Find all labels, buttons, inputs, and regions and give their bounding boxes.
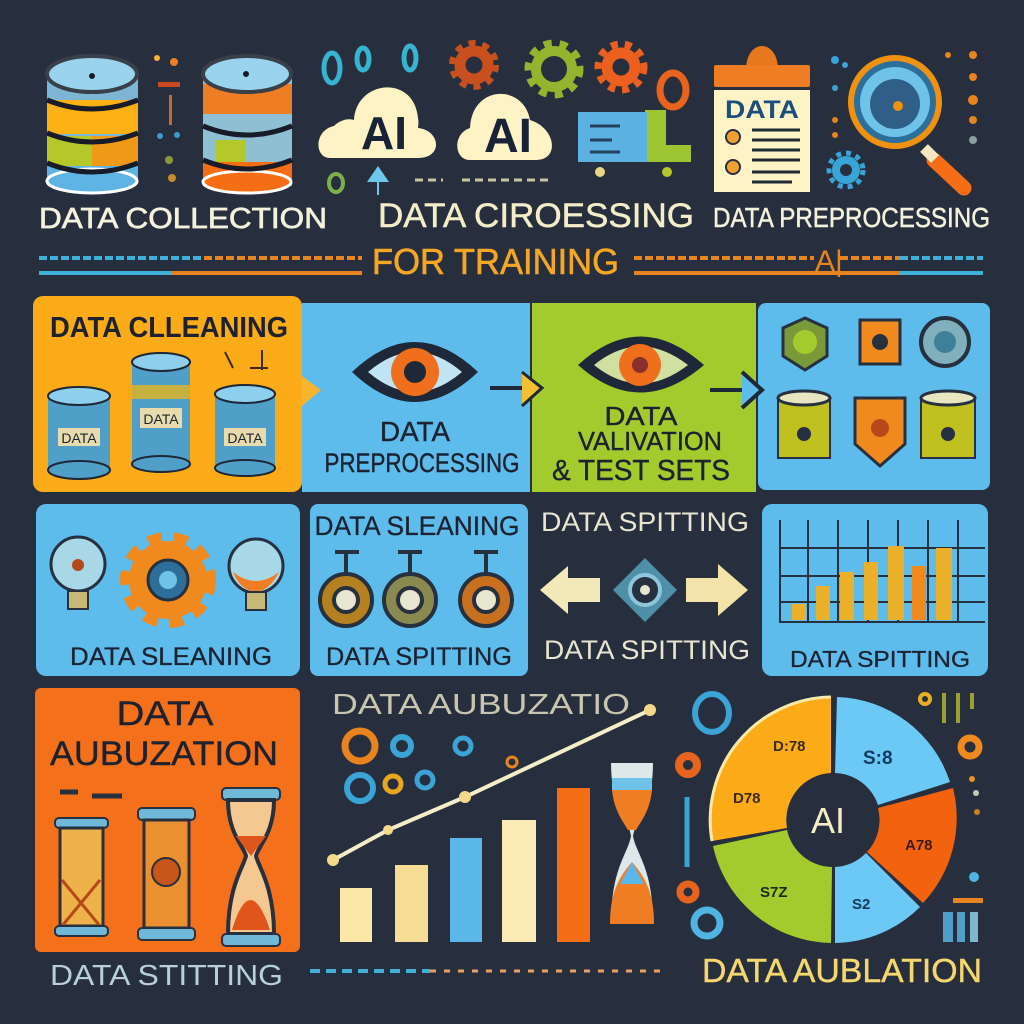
arrow: validation to icon grid xyxy=(710,372,762,408)
chart axis: dashed baseline xyxy=(310,969,430,973)
icon: AI cloud 2: AI xyxy=(484,110,532,163)
heading: for training: FOR TRAINING xyxy=(372,241,619,282)
icon: left side rings and bar xyxy=(679,694,729,936)
panel: data preprocessing xyxy=(302,303,530,492)
heading: data collection: DATA COLLECTION xyxy=(39,203,327,235)
icon: orange ring xyxy=(660,73,686,107)
panel: bar chart with grid xyxy=(762,504,988,676)
icon: small ring and marks under cloud xyxy=(329,174,552,192)
icon: gear green xyxy=(528,43,580,95)
panel: data validation and test sets xyxy=(532,303,756,492)
panel: bulbs and gear: DATA SLEANING xyxy=(70,643,272,671)
panel: data cleaning: DATA xyxy=(61,430,97,446)
caption: data aublation: DATA AUBLATION xyxy=(702,952,982,989)
panel: three reels xyxy=(310,504,528,676)
icon: top pins row xyxy=(324,46,416,83)
caption: data stitting: DATA STITTING xyxy=(50,960,283,992)
panel: data preprocessing: DATA xyxy=(380,416,450,447)
panel: bar chart with grid: DATA SPITTING xyxy=(790,646,970,672)
chart: pie with AI centre: D:78 xyxy=(773,738,806,755)
chart: pie with AI centre: S:8 xyxy=(863,748,893,769)
heading: data splitting bottom: DATA SPITTING xyxy=(544,635,750,665)
panel: data augmentation hourglasses xyxy=(35,688,300,952)
panel: data cleaning: DATA xyxy=(143,411,179,427)
heading: data splitting top: DATA SPITTING xyxy=(541,507,749,537)
chart: rising bars with trend line xyxy=(327,704,656,942)
panel: data cleaning: DATA CLLEANING xyxy=(50,312,288,344)
panel: data validation and test sets: VALIVATION xyxy=(578,426,722,456)
panel: data cleaning xyxy=(33,296,302,492)
heading: data processing: DATA CIROESSING xyxy=(378,197,694,235)
icon: rings above bar chart xyxy=(345,731,517,801)
icon: AI cloud 1: AI xyxy=(361,107,407,159)
chart axis: dashed baseline right xyxy=(430,970,660,972)
arrow: into preprocessing xyxy=(302,376,321,406)
arrow: left and right with centre icon xyxy=(540,558,748,622)
arrow: upward xyxy=(367,166,389,195)
panel: icon grid xyxy=(758,303,990,490)
icon: clipboard with data list: DATA xyxy=(725,96,799,124)
icon: gear brown-orange xyxy=(452,43,496,87)
panel: data preprocessing: PREPROCESSING xyxy=(324,448,520,478)
icon: small marks between cylinders xyxy=(154,55,180,182)
divider: left band xyxy=(39,258,362,273)
chart: pie with AI centre: S2 xyxy=(852,896,870,913)
chart: pie with AI centre: AI xyxy=(811,800,845,841)
chart: pie with AI centre: A78 xyxy=(905,837,933,854)
panel: data validation and test sets: & TEST SETS xyxy=(552,455,730,487)
icon: small blue gear xyxy=(829,153,863,187)
panel: three reels: DATA SLEANING xyxy=(314,511,520,541)
icon: right side rings and bars xyxy=(920,693,983,942)
icon: clipboard with data list xyxy=(714,46,810,192)
panel: bulbs and gear xyxy=(36,504,300,676)
icon: AI cloud 1 xyxy=(318,87,436,159)
chart: pie with AI centre: D78 xyxy=(733,790,761,807)
divider: right band with AI mark: A| xyxy=(815,245,843,278)
icon: magnifier xyxy=(851,58,964,188)
icon: database cylinder 2 xyxy=(203,56,292,193)
icon: truck xyxy=(578,110,691,177)
icon: gear orange xyxy=(598,44,644,90)
heading: chart title: DATA AUBUZATIO xyxy=(332,689,630,721)
chart: pie with AI centre: S7Z xyxy=(760,884,788,901)
panel: three reels: DATA SPITTING xyxy=(326,643,512,671)
icon: dot columns beside magnifier xyxy=(831,51,978,144)
arrow: preprocessing to validation xyxy=(490,372,542,406)
icon: hourglass beside bars xyxy=(610,762,654,924)
icon: AI cloud 2 xyxy=(457,94,552,163)
panel: data validation and test sets: DATA xyxy=(604,401,678,431)
panel: data augmentation hourglasses: AUBUZATION xyxy=(50,735,278,773)
icon: database cylinder 1 xyxy=(47,56,138,193)
chart: pie with AI centre xyxy=(710,697,957,943)
panel: data augmentation hourglasses: DATA xyxy=(116,695,214,733)
panel: data cleaning: DATA xyxy=(227,430,263,446)
